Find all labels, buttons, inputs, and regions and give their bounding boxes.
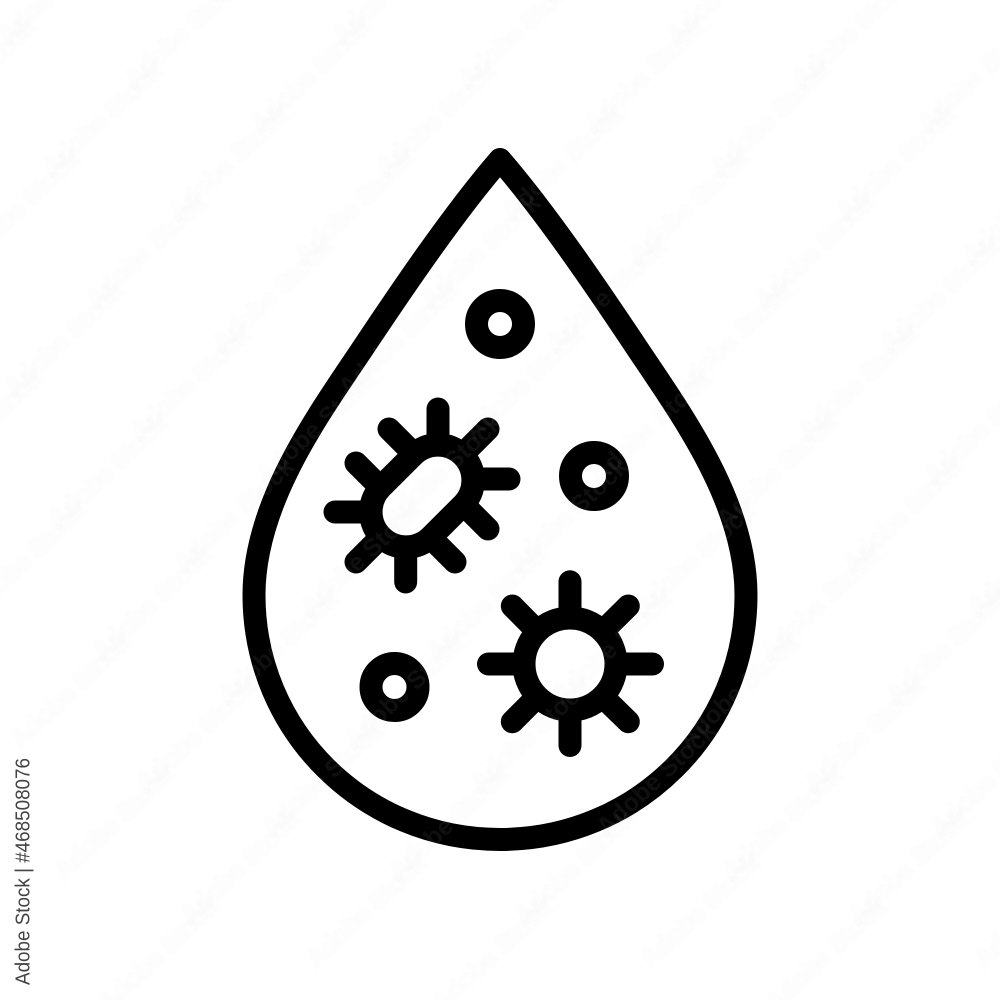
- faint diagonal watermark: Adobe Stock: [213, 585, 344, 709]
- small cell right: [570, 452, 618, 500]
- faint diagonal watermark: Adobe Stock: [339, 629, 470, 753]
- faint diagonal watermark: Adobe Stock: [125, 321, 256, 445]
- faint diagonal watermark: Adobe Stock: [163, 101, 294, 225]
- faint diagonal watermark: Adobe Stock: [377, 409, 508, 533]
- virus: [488, 582, 652, 746]
- small cell top: [476, 300, 524, 348]
- faint diagonal watermark: Adobe Stock: [585, 365, 716, 489]
- faint diagonal watermark: Adobe Stock: [0, 277, 130, 401]
- faint diagonal watermark: Adobe Stock: [245, 13, 376, 137]
- faint diagonal watermark: Adobe Stock: [175, 805, 306, 929]
- faint diagonal watermark: Adobe Stock: [793, 321, 924, 445]
- faint diagonal watermark: Adobe Stock: [623, 145, 754, 269]
- faint diagonal watermark: Adobe Stock: [497, 101, 628, 225]
- faint diagonal watermark: Adobe Stock: [579, 13, 710, 137]
- faint diagonal watermark: Adobe Stock: [591, 717, 722, 841]
- faint diagonal watermark: Adobe Stock: [711, 409, 842, 533]
- faint diagonal watermark: Adobe Stock: [459, 321, 590, 445]
- faint diagonal watermark: Adobe Stock: [87, 541, 218, 665]
- faint diagonal watermark: Adobe Stock: [635, 849, 766, 973]
- faint diagonal watermark: Adobe Stock: [295, 497, 426, 621]
- drop outline: [254, 160, 746, 840]
- faint diagonal watermark: Adobe Stock: [301, 849, 432, 973]
- faint diagonal watermark: Adobe Stock: [169, 453, 300, 577]
- faint diagonal watermark: Adobe Stock: [749, 189, 880, 313]
- faint diagonal watermark: Adobe Stock: [465, 673, 596, 797]
- faint diagonal watermark: Adobe Stock: [333, 277, 464, 401]
- faint diagonal watermark: Adobe Stock: [541, 233, 672, 357]
- faint diagonal watermark: Adobe Stock: [131, 673, 262, 797]
- faint diagonal watermark: Adobe Stock: [5, 629, 136, 753]
- faint diagonal watermark: Adobe Stock: [383, 761, 514, 885]
- faint diagonal watermark: Adobe Stock: [673, 629, 804, 753]
- faint diagonal watermark: Adobe Stock: [415, 189, 546, 313]
- faint diagonal watermark: Adobe Stock: [371, 57, 502, 181]
- faint diagonal watermark: Adobe Stock: [755, 541, 886, 665]
- faint diagonal watermark: Adobe Stock: [43, 409, 174, 533]
- bacterium: [335, 409, 509, 582]
- faint diagonal watermark: Adobe Stock: [837, 453, 968, 577]
- faint diagonal watermark: Adobe Stock: [207, 233, 338, 357]
- faint diagonal watermark: Adobe Stock: [667, 277, 798, 401]
- faint diagonal watermark: Adobe Stock: [717, 761, 848, 885]
- faint diagonal watermark: Adobe Stock: [81, 189, 212, 313]
- faint diagonal watermark: Adobe Stock: [421, 541, 552, 665]
- faint diagonal watermark: Adobe Stock: [37, 57, 168, 181]
- small cell bottom left: [371, 664, 418, 710]
- faint diagonal watermark: Adobe Stock: [799, 673, 930, 797]
- faint diagonal watermark: Adobe Stock: [509, 805, 640, 929]
- icon: contaminated water drop: [254, 160, 746, 840]
- faint diagonal watermark: Adobe Stock: [251, 365, 382, 489]
- faint diagonal watermark: Adobe Stock: [257, 717, 388, 841]
- faint diagonal watermark: Adobe Stock: [289, 145, 420, 269]
- faint diagonal watermark: Adobe Stock: [629, 497, 760, 621]
- faint diagonal watermark: Adobe Stock: [503, 453, 634, 577]
- faint diagonal watermark: Adobe Stock: [843, 805, 974, 929]
- faint diagonal watermark: Adobe Stock: [831, 101, 962, 225]
- faint diagonal watermark: Adobe Stock: [705, 57, 836, 181]
- stock id label: Adobe Stock | #468508076: [12, 758, 34, 985]
- faint diagonal watermark: Adobe Stock: [547, 585, 678, 709]
- faint diagonal watermark: Adobe Stock: [49, 761, 180, 885]
